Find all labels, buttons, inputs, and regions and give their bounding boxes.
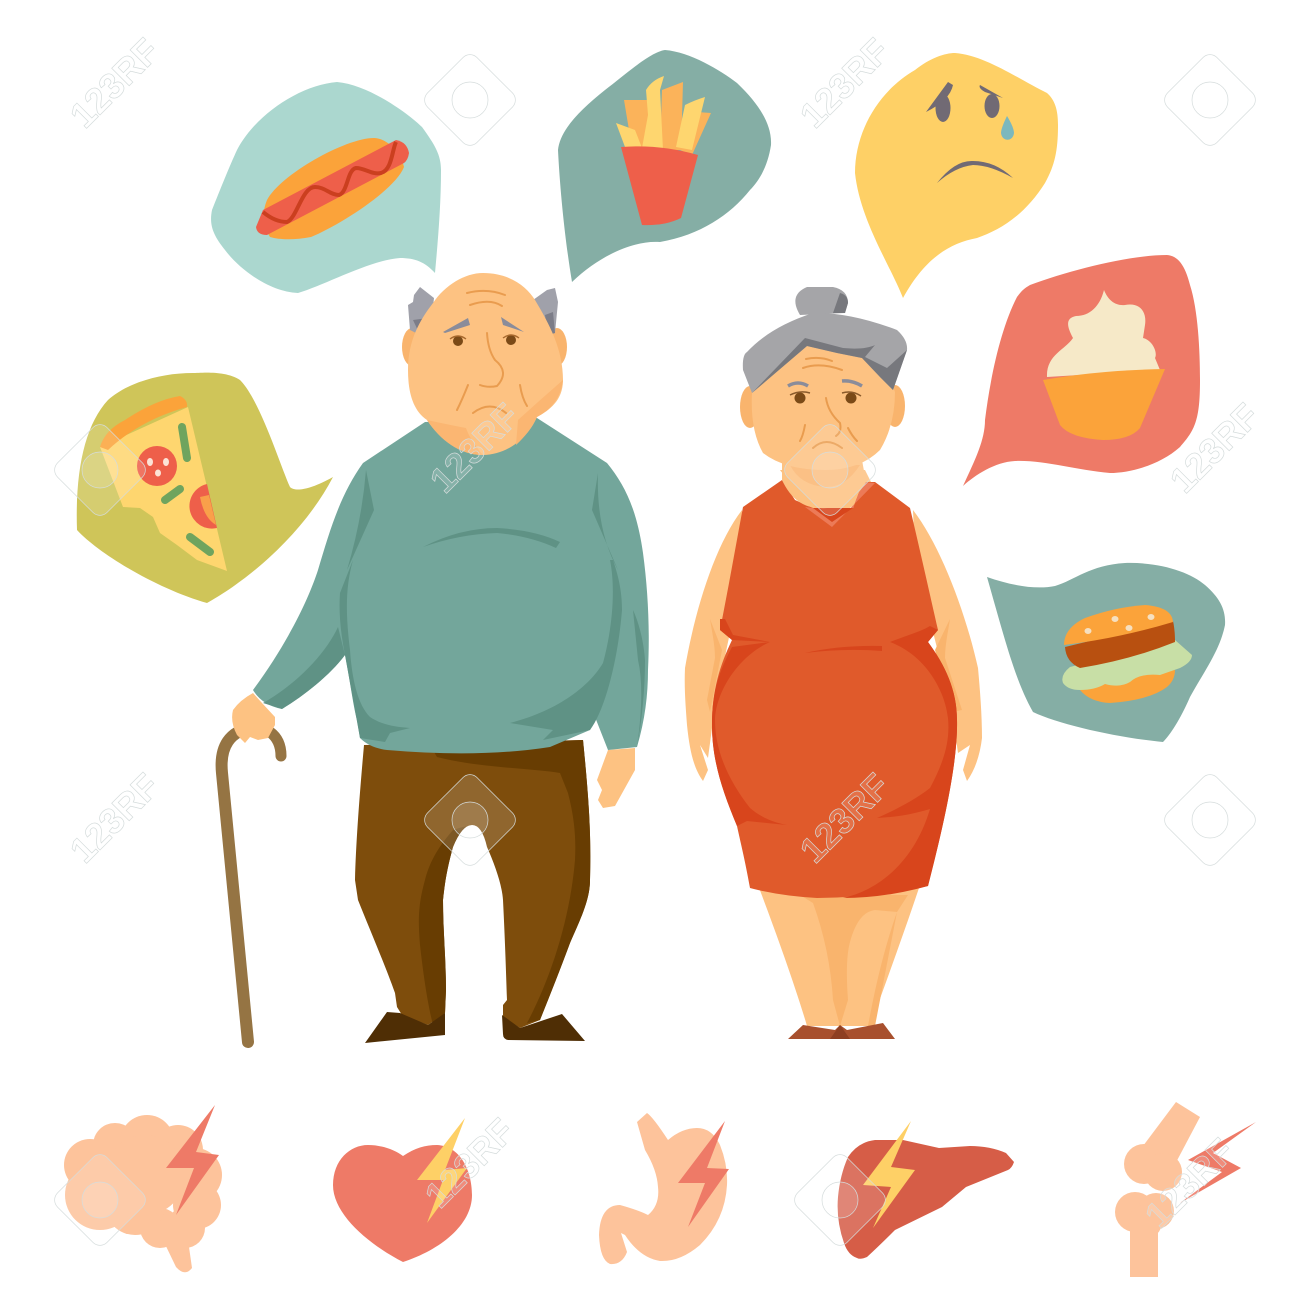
sweater bbox=[253, 418, 649, 753]
ears bbox=[402, 328, 422, 366]
eyes bbox=[453, 336, 463, 346]
legs bbox=[758, 885, 920, 1026]
dress bbox=[712, 480, 957, 898]
icon: heart with bolt bbox=[333, 1118, 472, 1262]
watermark: 123RF bbox=[62, 765, 167, 871]
shoes bbox=[788, 1023, 895, 1039]
icon: brain with bolt bbox=[64, 1105, 222, 1272]
speech bubble: hot dog bbox=[211, 82, 441, 293]
speech bubble: burger bbox=[987, 563, 1225, 742]
icon: liver with bolt bbox=[838, 1121, 1014, 1259]
speech bubble: cupcake bbox=[963, 255, 1200, 486]
watermark: 123RF bbox=[792, 30, 897, 136]
eyebrows bbox=[443, 317, 524, 333]
shoes bbox=[365, 1012, 445, 1043]
head bbox=[408, 273, 563, 455]
character: old man bbox=[222, 273, 649, 1043]
watermark: 123RF bbox=[422, 395, 527, 501]
icon: knee joint with bolt bbox=[1115, 1102, 1256, 1277]
face lines bbox=[800, 358, 857, 448]
hair bbox=[743, 313, 907, 393]
chin fold bbox=[427, 380, 563, 455]
watermark: 123RF bbox=[1162, 395, 1267, 501]
ears bbox=[740, 386, 760, 428]
sweater folds bbox=[263, 470, 645, 747]
speech bubble: pizza bbox=[77, 373, 333, 603]
dress folds bbox=[712, 619, 957, 898]
head bbox=[752, 340, 895, 470]
watermark: 123RF bbox=[62, 30, 167, 136]
trousers bbox=[355, 740, 590, 1028]
collar bbox=[805, 482, 875, 527]
speech bubble: french fries bbox=[558, 50, 771, 282]
character: old woman bbox=[685, 287, 982, 1039]
watermark: 123RF bbox=[417, 1110, 522, 1216]
arms bbox=[685, 510, 745, 781]
neck bbox=[780, 470, 875, 515]
face lines bbox=[457, 291, 527, 413]
hair tufts bbox=[408, 287, 434, 335]
watermark: 123RF bbox=[1137, 1130, 1242, 1236]
watermark: 123RF bbox=[792, 765, 897, 871]
left hand bbox=[232, 693, 275, 743]
hair bun bbox=[795, 287, 848, 315]
cane bbox=[222, 727, 253, 1042]
eyes bbox=[794, 392, 806, 404]
eyebrows bbox=[788, 381, 862, 386]
second chin bbox=[782, 460, 866, 508]
right hand bbox=[597, 748, 635, 808]
speech bubble: sad face bbox=[855, 53, 1058, 298]
icon: stomach with bolt bbox=[599, 1113, 729, 1264]
